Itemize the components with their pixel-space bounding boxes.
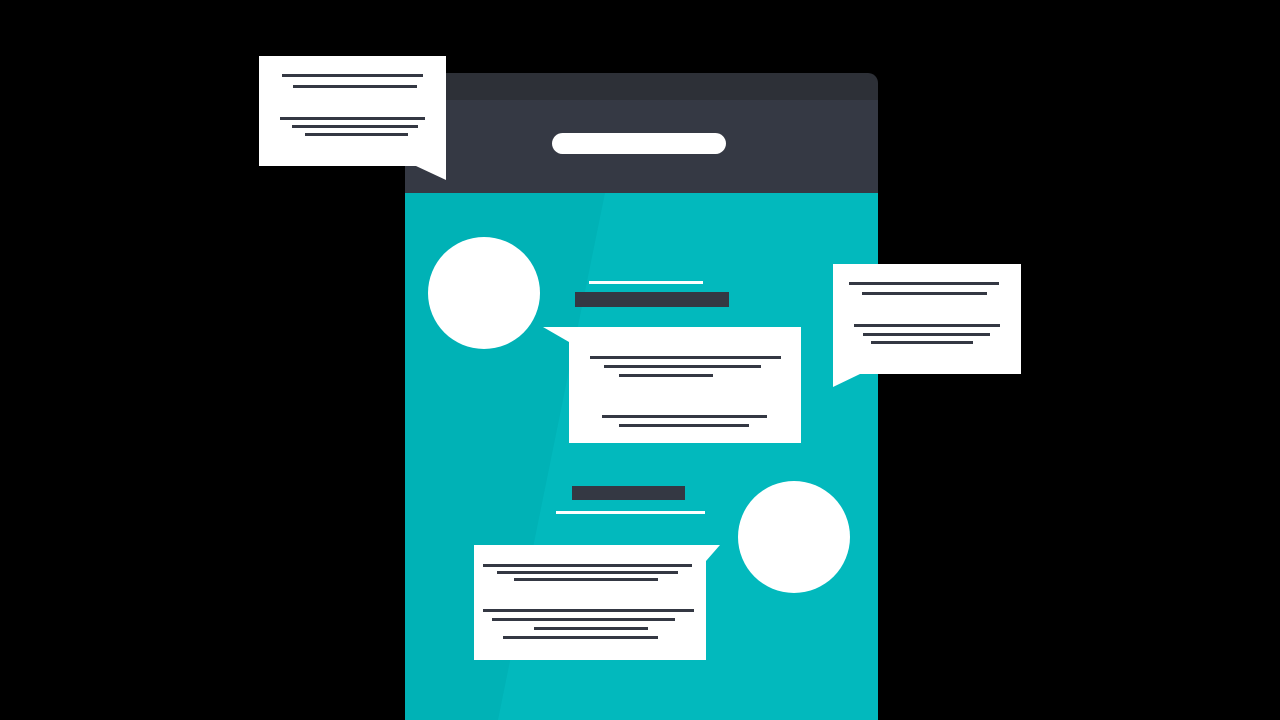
phone screen [405, 193, 878, 720]
bubble: bottom [474, 545, 720, 660]
phone [405, 73, 878, 720]
avatar circle 2 [738, 481, 850, 593]
avatar circle 1 [428, 237, 540, 349]
search pill [552, 133, 726, 154]
bubble: right [833, 264, 1021, 387]
bubble: center [543, 327, 801, 443]
name lines 2 [556, 486, 705, 514]
name lines 1 [575, 281, 729, 307]
phone top strip [405, 73, 878, 103]
phone header [405, 100, 878, 193]
screen shade [405, 193, 605, 720]
bubble: top left [259, 56, 446, 180]
